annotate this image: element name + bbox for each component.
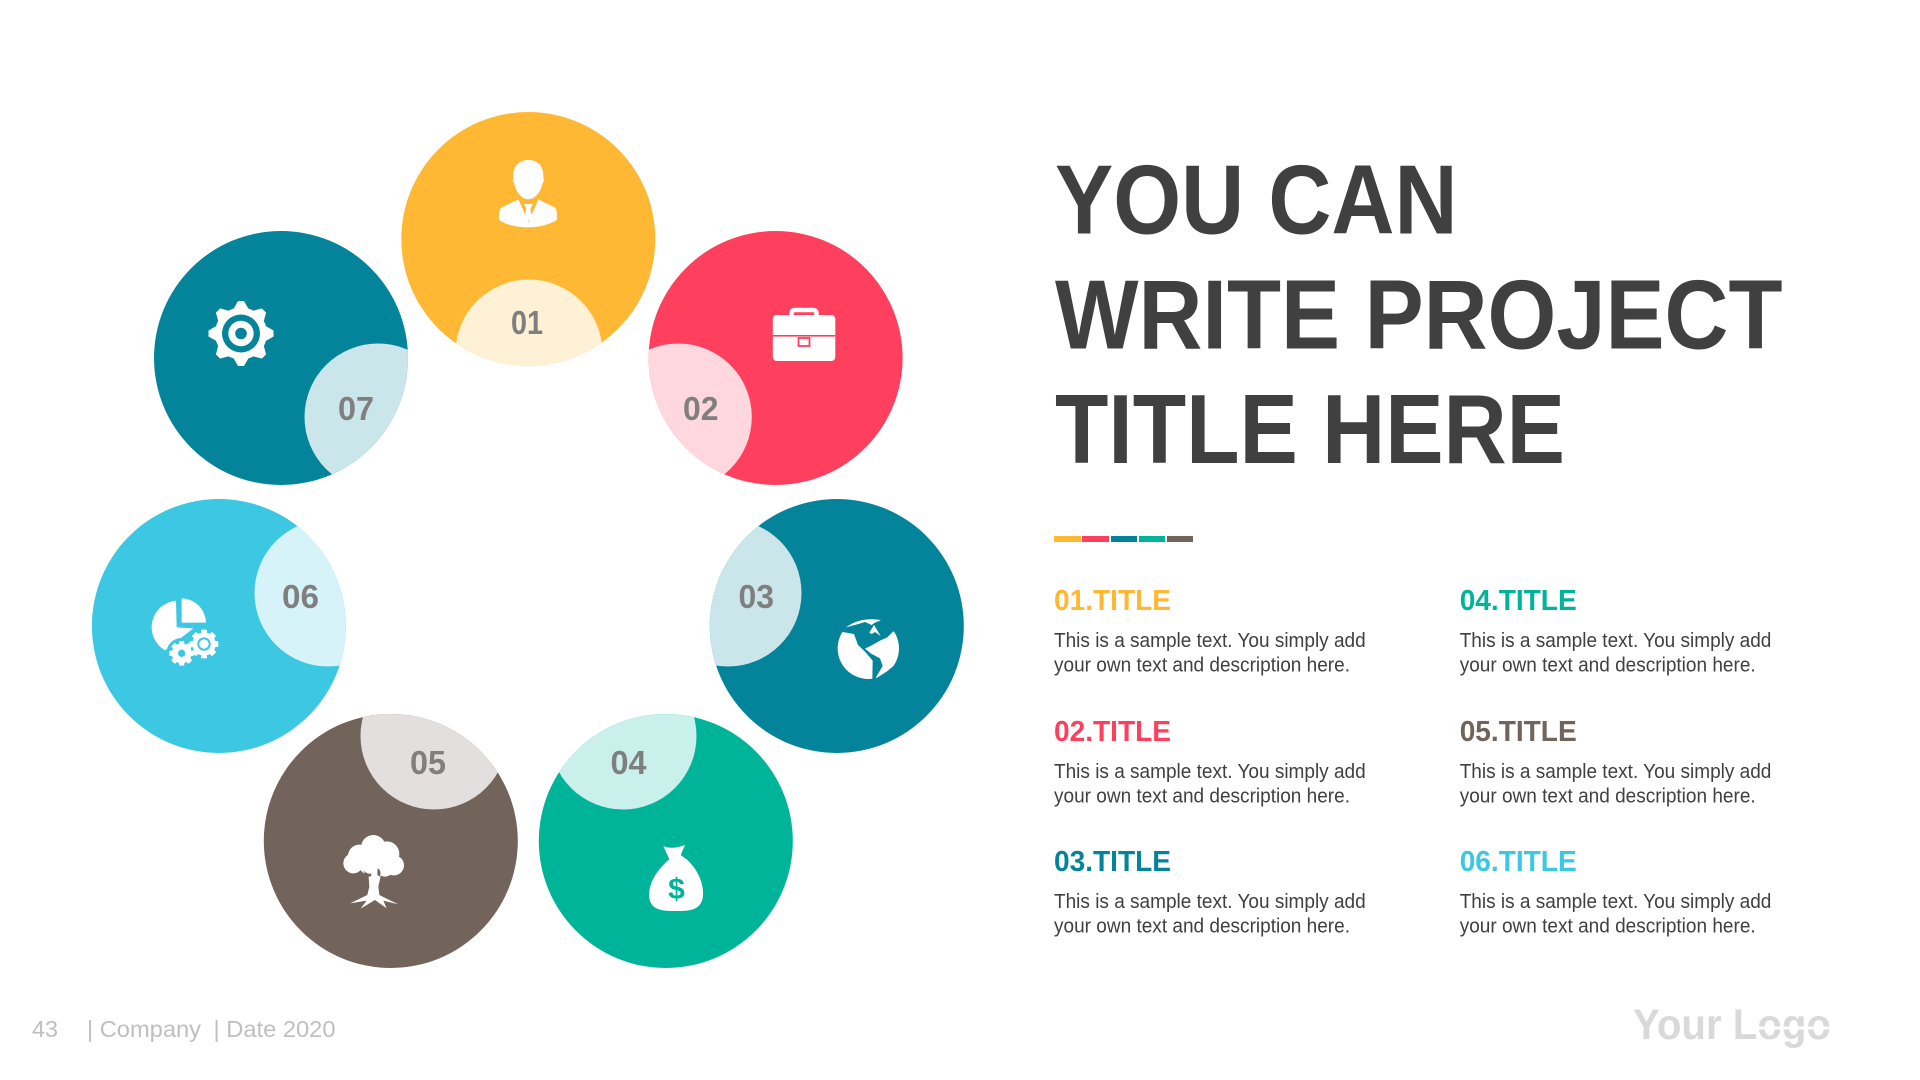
icon: globe <box>833 619 901 680</box>
circle 02: briefcase: 02 <box>683 390 718 427</box>
title: YOU CAN <box>1055 144 1458 254</box>
circle 05: tree: 05 <box>410 744 446 781</box>
text block 05: 05.TITLE <box>1460 716 1577 748</box>
text block 04 <box>1460 585 1771 676</box>
text block 03: 03.TITLE <box>1054 846 1171 878</box>
circle 06: pie chart and gears: 06 <box>282 578 319 615</box>
text block 06: 06.TITLE <box>1460 846 1577 878</box>
icon: businessman <box>499 160 557 227</box>
footer: | Date 2020 <box>214 1016 336 1042</box>
circle 06: pie chart and gears <box>92 499 346 753</box>
text block 04: This is a sample text. You simply add <box>1460 630 1771 652</box>
icon: money bag <box>649 845 703 911</box>
footer <box>32 1016 336 1042</box>
text block 06: This is a sample text. You simply add <box>1460 891 1771 913</box>
text block 01 <box>1054 585 1366 676</box>
circle 04: money bag <box>538 714 793 968</box>
circle 01: person: 01 <box>511 304 543 341</box>
text block 06 <box>1460 846 1771 938</box>
circle 01: person <box>401 112 656 366</box>
circle 03: globe: 03 <box>738 578 774 615</box>
text block 02: 02.TITLE <box>1054 716 1171 748</box>
text block 02 <box>1054 716 1366 808</box>
icon: briefcase <box>773 310 835 361</box>
circle 05: tree <box>264 714 518 968</box>
circle 04: money bag: 04 <box>610 744 647 781</box>
text block 05 <box>1460 716 1771 808</box>
text block 01: your own text and description here. <box>1054 654 1350 676</box>
icon: gear <box>208 301 274 366</box>
title <box>1055 144 1782 484</box>
text block 03 <box>1054 846 1366 938</box>
circular diagram <box>92 112 964 968</box>
circle 03: globe <box>710 499 964 753</box>
circle 07: gear: 07 <box>338 390 374 427</box>
text block 04: your own text and description here. <box>1460 654 1756 676</box>
icon: money bag: $ <box>668 873 685 906</box>
text block 02: your own text and description here. <box>1054 786 1350 808</box>
text block 01: This is a sample text. You simply add <box>1054 630 1366 652</box>
title: WRITE PROJECT <box>1055 260 1782 370</box>
logo: Your Logo <box>1633 1001 1831 1049</box>
text block 03: This is a sample text. You simply add <box>1054 891 1366 913</box>
text block 05: This is a sample text. You simply add <box>1460 761 1771 783</box>
colour bar <box>1054 536 1193 542</box>
text block 05: your own text and description here. <box>1460 786 1756 808</box>
text block 02: This is a sample text. You simply add <box>1054 761 1366 783</box>
icon: tree <box>343 835 404 909</box>
icon: pie chart with gears <box>152 598 221 669</box>
footer: | Company <box>87 1016 201 1042</box>
title: TITLE HERE <box>1055 374 1565 484</box>
text block 03: your own text and description here. <box>1054 916 1350 938</box>
text block 01: 01.TITLE <box>1054 585 1171 617</box>
text block 04: 04.TITLE <box>1460 585 1577 617</box>
text block 06: your own text and description here. <box>1460 916 1756 938</box>
footer: 43 <box>32 1016 58 1042</box>
circle 07: gear <box>154 231 408 485</box>
circle 02: briefcase <box>648 231 903 485</box>
